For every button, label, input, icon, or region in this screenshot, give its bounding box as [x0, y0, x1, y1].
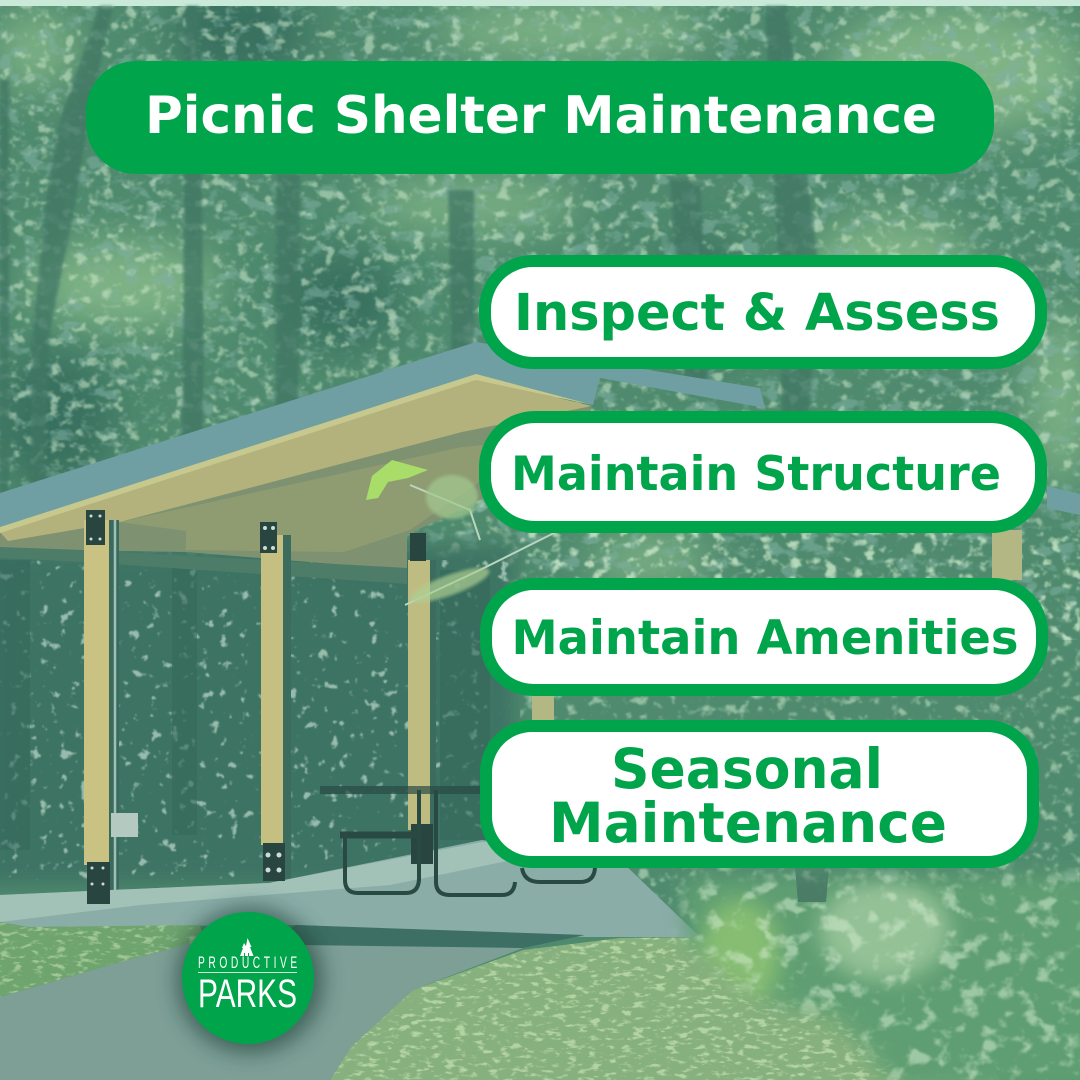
background: dark woods beneath the shelter	[0, 545, 515, 885]
dark canopy patches	[0, 0, 750, 490]
pill: Maintain Structure: Maintain Structure	[511, 447, 1001, 502]
pill: Inspect & Assess: Inspect & Assess	[514, 284, 1000, 343]
tree trunks	[0, 6, 817, 550]
ground: slab, grass, path and bushes	[0, 840, 1080, 1080]
pill: Maintain Structure	[485, 417, 1041, 527]
bright canopy patches	[0, 0, 1080, 585]
picnic table	[320, 790, 595, 895]
title banner	[86, 61, 994, 174]
conduit and electrical box	[114, 520, 116, 900]
soffit	[0, 378, 592, 570]
right grass bank	[330, 900, 1000, 1080]
logo: Productive Parks	[176, 906, 324, 1054]
pill: Seasonal Maintenance: Seasonal	[611, 737, 883, 801]
shelter	[0, 342, 1080, 905]
pill: Maintain Amenities	[486, 584, 1042, 690]
pill: Seasonal Maintenance	[486, 726, 1033, 862]
pill: Inspect & Assess	[485, 261, 1041, 363]
logo: Productive Parks: PARKS	[198, 972, 297, 1016]
branch with bright leaves	[366, 460, 560, 609]
roof fascia	[0, 342, 765, 527]
beam under the soffit	[0, 547, 407, 584]
icon: trees	[240, 938, 254, 956]
posts	[84, 520, 436, 905]
pill: Maintain Amenities: Maintain Amenities	[512, 611, 1018, 666]
back pillar	[532, 530, 1022, 725]
logo: Productive Parks: PRODUCTIVE	[198, 954, 297, 972]
post base brackets and caps	[86, 510, 433, 904]
title banner: Picnic Shelter Maintenance	[145, 86, 937, 146]
pill: Seasonal Maintenance: Maintenance	[549, 791, 947, 855]
